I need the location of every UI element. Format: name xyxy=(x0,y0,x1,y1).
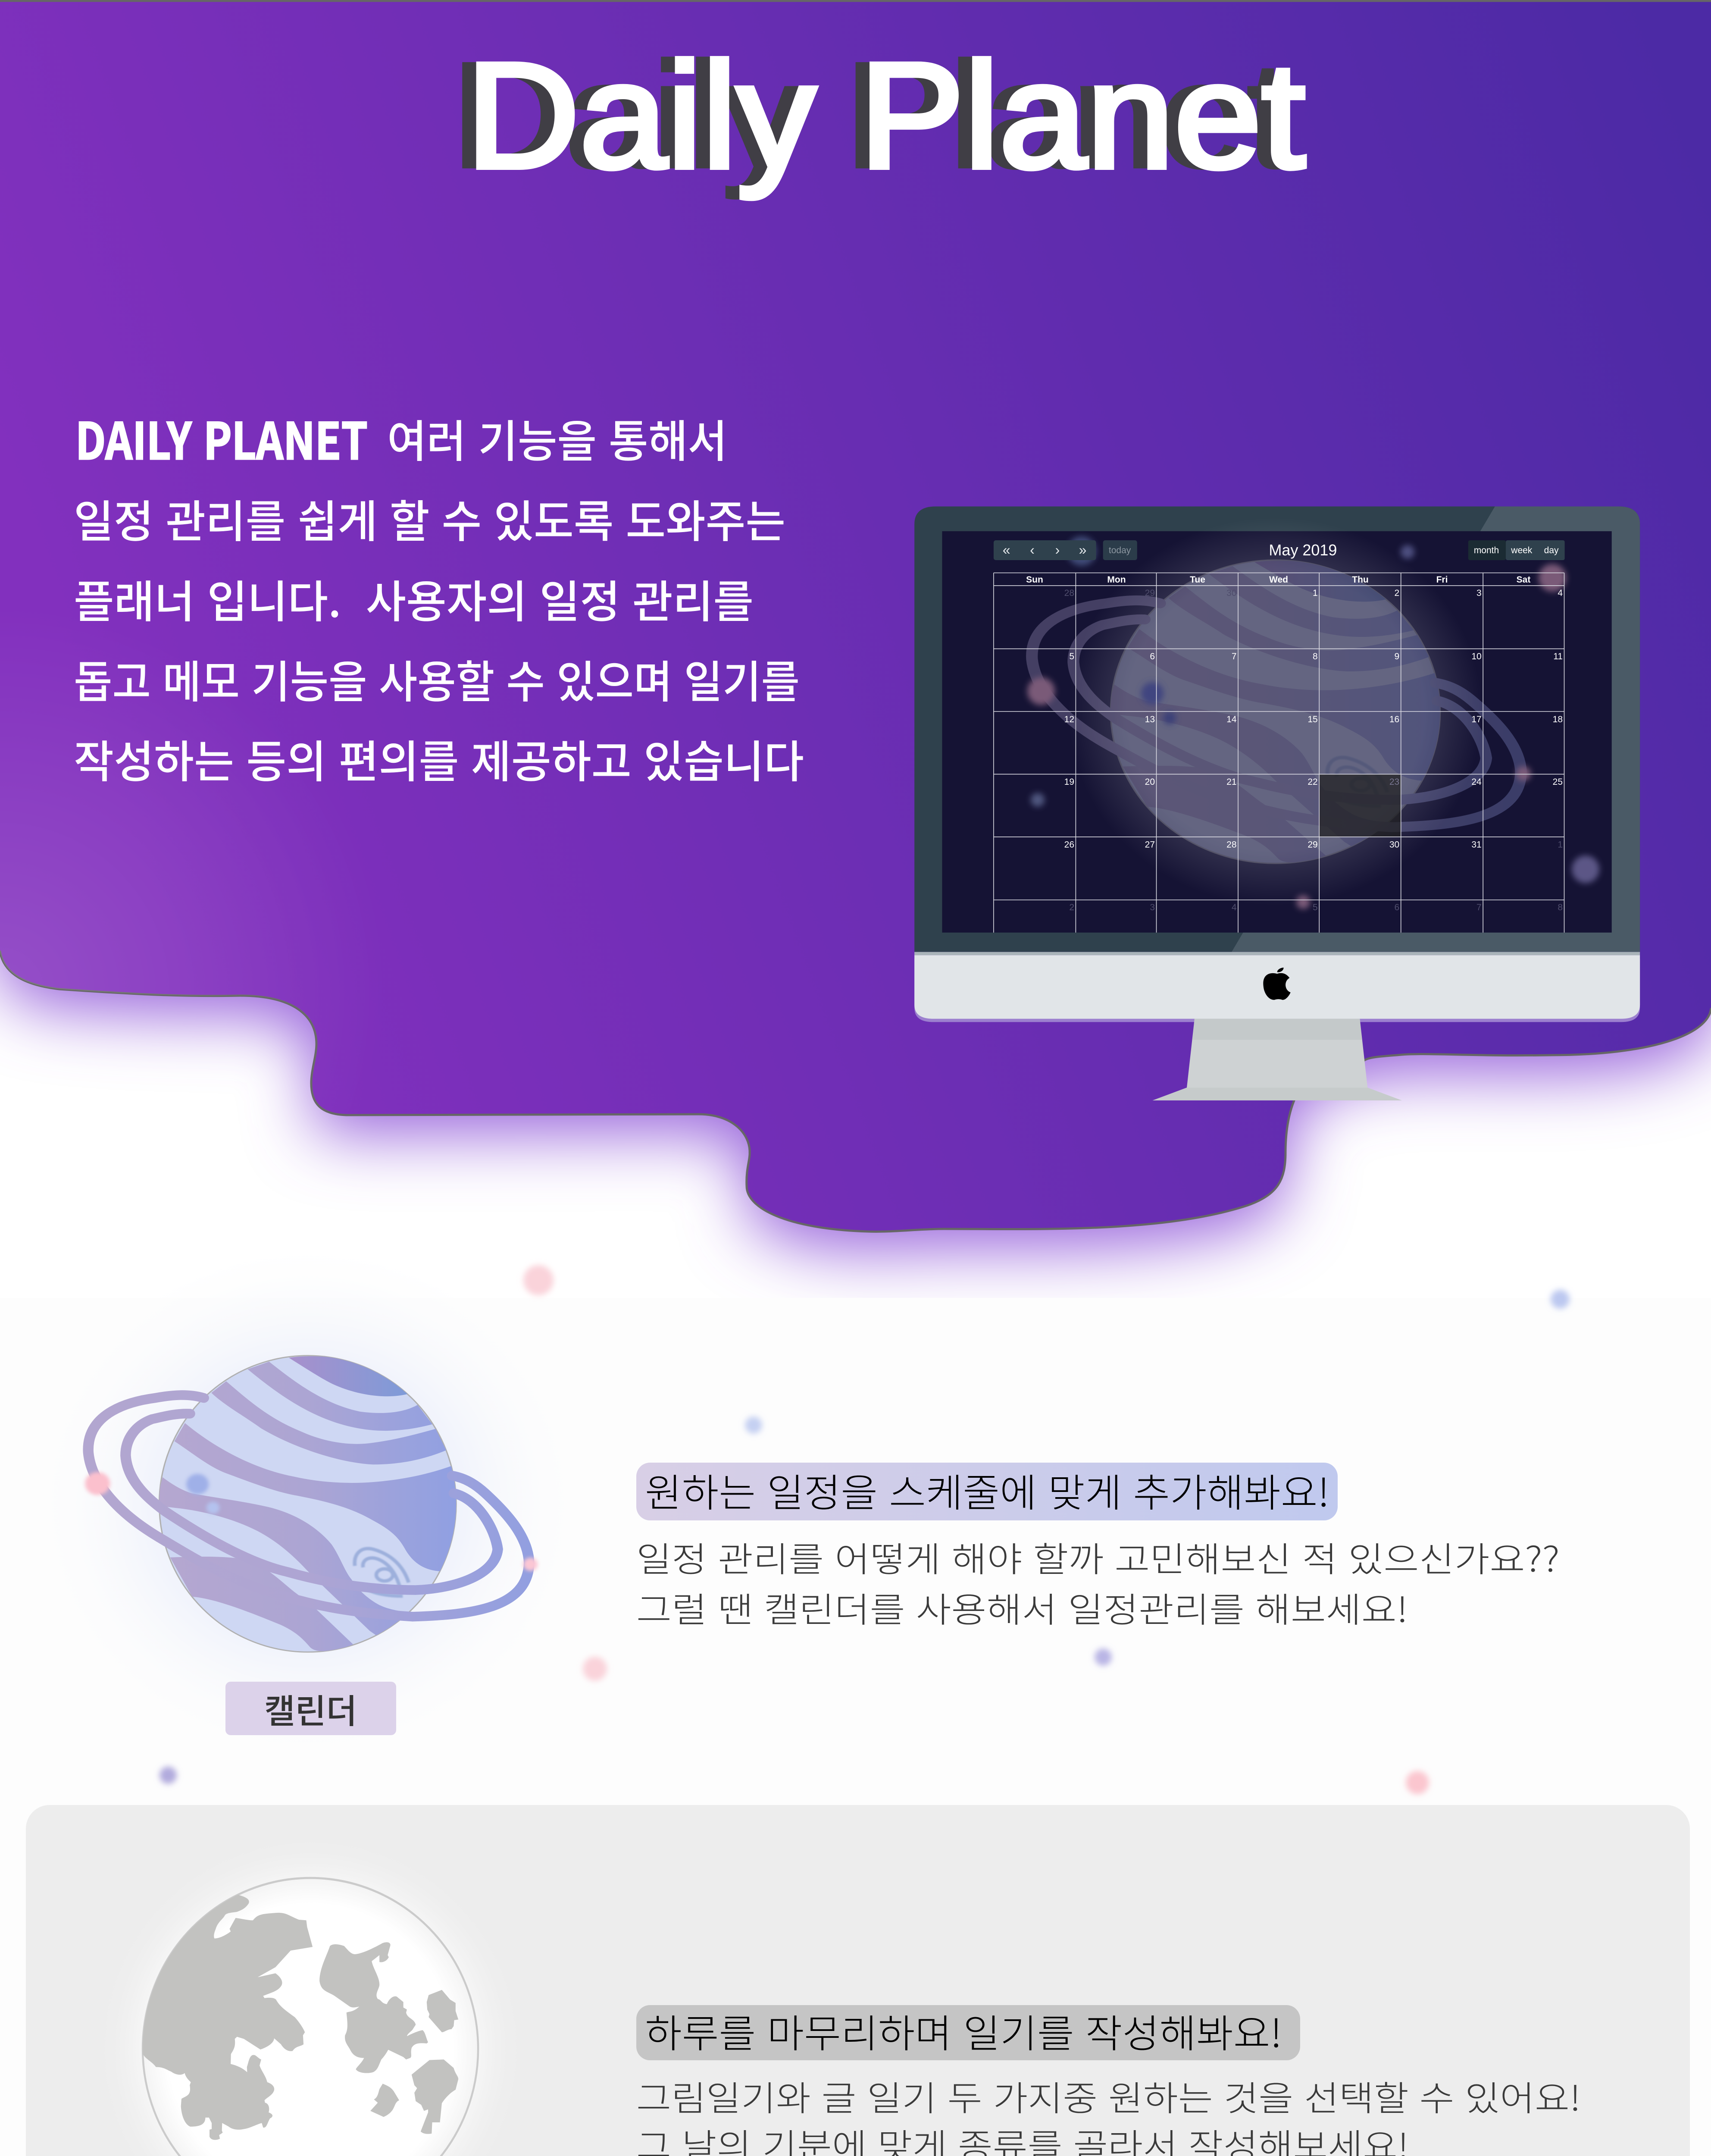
intro text block xyxy=(74,401,804,790)
calendar header and dates: 8 xyxy=(1313,652,1318,661)
body text: calendar xyxy=(636,1532,1560,1633)
calendar header and dates: 5 xyxy=(1069,652,1074,661)
moon glow xyxy=(95,1833,526,2156)
intro text block: 일정 관리를 쉽게 할 수 있도록 도와주는 xyxy=(74,486,785,550)
calendar toolbar xyxy=(994,540,1565,560)
screen planet wallpaper xyxy=(1027,517,1599,909)
calendar header and dates: 10 xyxy=(1471,652,1482,661)
calendar header and dates: 23 xyxy=(1389,777,1399,787)
calendar header and dates: Mon xyxy=(1107,575,1126,585)
calendar toolbar: › xyxy=(1055,542,1060,558)
calendar header and dates: 4 xyxy=(1558,588,1563,598)
label: calendar xyxy=(225,1682,396,1735)
calendar header and dates: 20 xyxy=(1145,777,1155,787)
calendar header and dates: Sun xyxy=(1026,575,1043,585)
calendar header and dates: 22 xyxy=(1307,777,1318,787)
calendar header and dates: 4 xyxy=(1232,903,1237,912)
calendar header and dates: 1 xyxy=(1313,588,1318,598)
calendar header and dates xyxy=(1026,575,1563,912)
calendar header and dates: Thu xyxy=(1352,575,1369,585)
calendar header and dates: 18 xyxy=(1553,714,1563,724)
calendar header and dates: 6 xyxy=(1150,652,1155,661)
calendar toolbar: week xyxy=(1511,545,1533,555)
title: Daily Planet xyxy=(466,31,1306,200)
icon: ringed planet xyxy=(85,1356,538,1652)
calendar header and dates: 28 xyxy=(1064,588,1074,598)
calendar header and dates: 26 xyxy=(1064,840,1074,849)
monitor with calendar xyxy=(914,507,1640,1100)
calendar header and dates: 9 xyxy=(1395,652,1399,661)
calendar header and dates: 6 xyxy=(1395,903,1399,912)
panel: diary section background xyxy=(26,1805,1690,2156)
body text: calendar: 그럴 땐 캘린더를 사용해서 일정관리를 해보세요! xyxy=(636,1583,1408,1633)
calendar header and dates: 13 xyxy=(1145,714,1155,724)
decorative floating dots xyxy=(134,1265,1570,2156)
body text: calendar: 일정 관리를 어떻게 해야 할까 고민해보신 적 있으신가요?? xyxy=(636,1532,1560,1582)
calendar header and dates: 30 xyxy=(1389,840,1399,849)
calendar header and dates: Sat xyxy=(1517,575,1530,585)
calendar header and dates: 27 xyxy=(1145,840,1155,849)
calendar header and dates: Tue xyxy=(1190,575,1205,585)
calendar header and dates: 29 xyxy=(1307,840,1318,849)
calendar header and dates: 8 xyxy=(1558,903,1563,912)
calendar header and dates: 7 xyxy=(1232,652,1236,661)
calendar header and dates: 1 xyxy=(1558,840,1563,849)
calendar header and dates: 19 xyxy=(1064,777,1074,787)
calendar header and dates: 16 xyxy=(1389,714,1399,724)
icon: moon xyxy=(135,1878,478,2156)
today highlight cell xyxy=(1319,774,1401,837)
calendar header and dates: 30 xyxy=(1226,588,1236,598)
intro text block: 작성하는 등의 편의를 제공하고 있습니다 xyxy=(74,726,804,790)
intro text block: 돕고 메모 기능을 사용할 수 있으며 일기를 xyxy=(74,646,800,711)
label: calendar: 캘린더 xyxy=(264,1685,357,1733)
calendar toolbar: May 2019 xyxy=(1269,541,1337,559)
calendar header and dates: 15 xyxy=(1307,714,1318,724)
title: Daily Planet xyxy=(451,31,1291,200)
body text: diary: 그림일기와 글 일기 두 가지중 원하는 것을 선택할 수 있어요! xyxy=(636,2071,1581,2121)
calendar header and dates: 24 xyxy=(1471,777,1482,787)
calendar toolbar: ‹ xyxy=(1030,542,1035,558)
calendar header and dates: 3 xyxy=(1150,903,1155,912)
planet glow xyxy=(32,1245,584,1762)
calendar header and dates: 12 xyxy=(1064,714,1074,724)
hero shadow xyxy=(0,956,1711,1298)
calendar header and dates: Fri xyxy=(1436,575,1448,585)
calendar header and dates: 7 xyxy=(1476,903,1482,912)
calendar toolbar: today xyxy=(1109,545,1131,555)
calendar header and dates: Wed xyxy=(1269,575,1288,585)
calendar toolbar: » xyxy=(1079,542,1086,558)
calendar header and dates: 28 xyxy=(1226,840,1236,849)
calendar header and dates: 5 xyxy=(1313,903,1318,912)
heading: diary: 하루를 마무리하며 일기를 작성해봐요! xyxy=(645,2002,1282,2059)
heading: calendar: 원하는 일정을 스케줄에 맞게 추가해봐요! xyxy=(645,1462,1329,1518)
intro text block: 플래너 입니다. 사용자의 일정 관리를 xyxy=(74,566,754,630)
hero purple wave panel xyxy=(0,1,1711,1232)
calendar header and dates: 17 xyxy=(1471,714,1482,724)
intro text block: DAILY PLANET xyxy=(75,401,368,474)
calendar header and dates: 21 xyxy=(1226,777,1236,787)
calendar toolbar: month xyxy=(1474,545,1499,555)
panel: diary feature xyxy=(141,1877,1577,2156)
calendar toolbar: « xyxy=(1003,542,1010,558)
panel: calendar feature xyxy=(32,1245,1560,1762)
calendar toolbar: day xyxy=(1544,545,1559,555)
calendar header and dates: 25 xyxy=(1553,777,1563,787)
intro text block: 여러 기능을 통해서 xyxy=(387,406,727,470)
calendar header and dates: 11 xyxy=(1553,652,1563,661)
monitor body xyxy=(914,507,1640,1100)
calendar header and dates: 2 xyxy=(1395,588,1399,598)
body text: diary xyxy=(636,2071,1581,2156)
calendar header and dates: 2 xyxy=(1069,903,1074,912)
calendar header and dates: 31 xyxy=(1471,840,1482,849)
calendar grid xyxy=(994,573,1564,933)
calendar header and dates: 3 xyxy=(1476,588,1482,598)
calendar header and dates: 14 xyxy=(1226,714,1237,724)
calendar header and dates: 29 xyxy=(1145,588,1155,598)
